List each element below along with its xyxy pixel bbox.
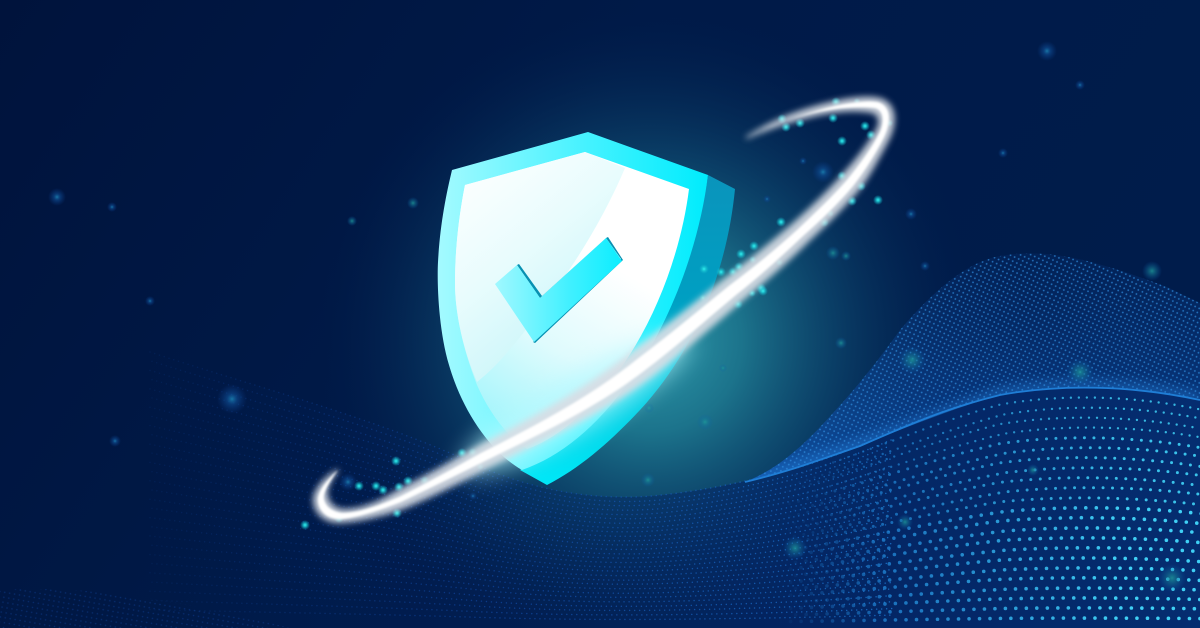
wave bright edge (745, 388, 1200, 482)
shield outer rim (438, 132, 708, 470)
wave fill (150, 352, 1200, 628)
shield inner highlight (455, 152, 625, 382)
shield side depth (520, 175, 735, 485)
ring cyan glow over shield (449, 317, 701, 493)
orbit ring of light (314, 98, 894, 522)
shield inner panel (455, 152, 689, 449)
central teal glow (320, 10, 980, 628)
shield (438, 132, 735, 485)
wave: bottom-left faint mesh (0, 589, 290, 628)
ring soft halo (314, 98, 894, 522)
check mark (495, 237, 623, 343)
ring white core (318, 102, 889, 519)
wave: lower dotted mesh (150, 352, 1200, 628)
wave: upper crest fine mesh (745, 253, 1200, 482)
teal particles around ring (300, 97, 893, 530)
